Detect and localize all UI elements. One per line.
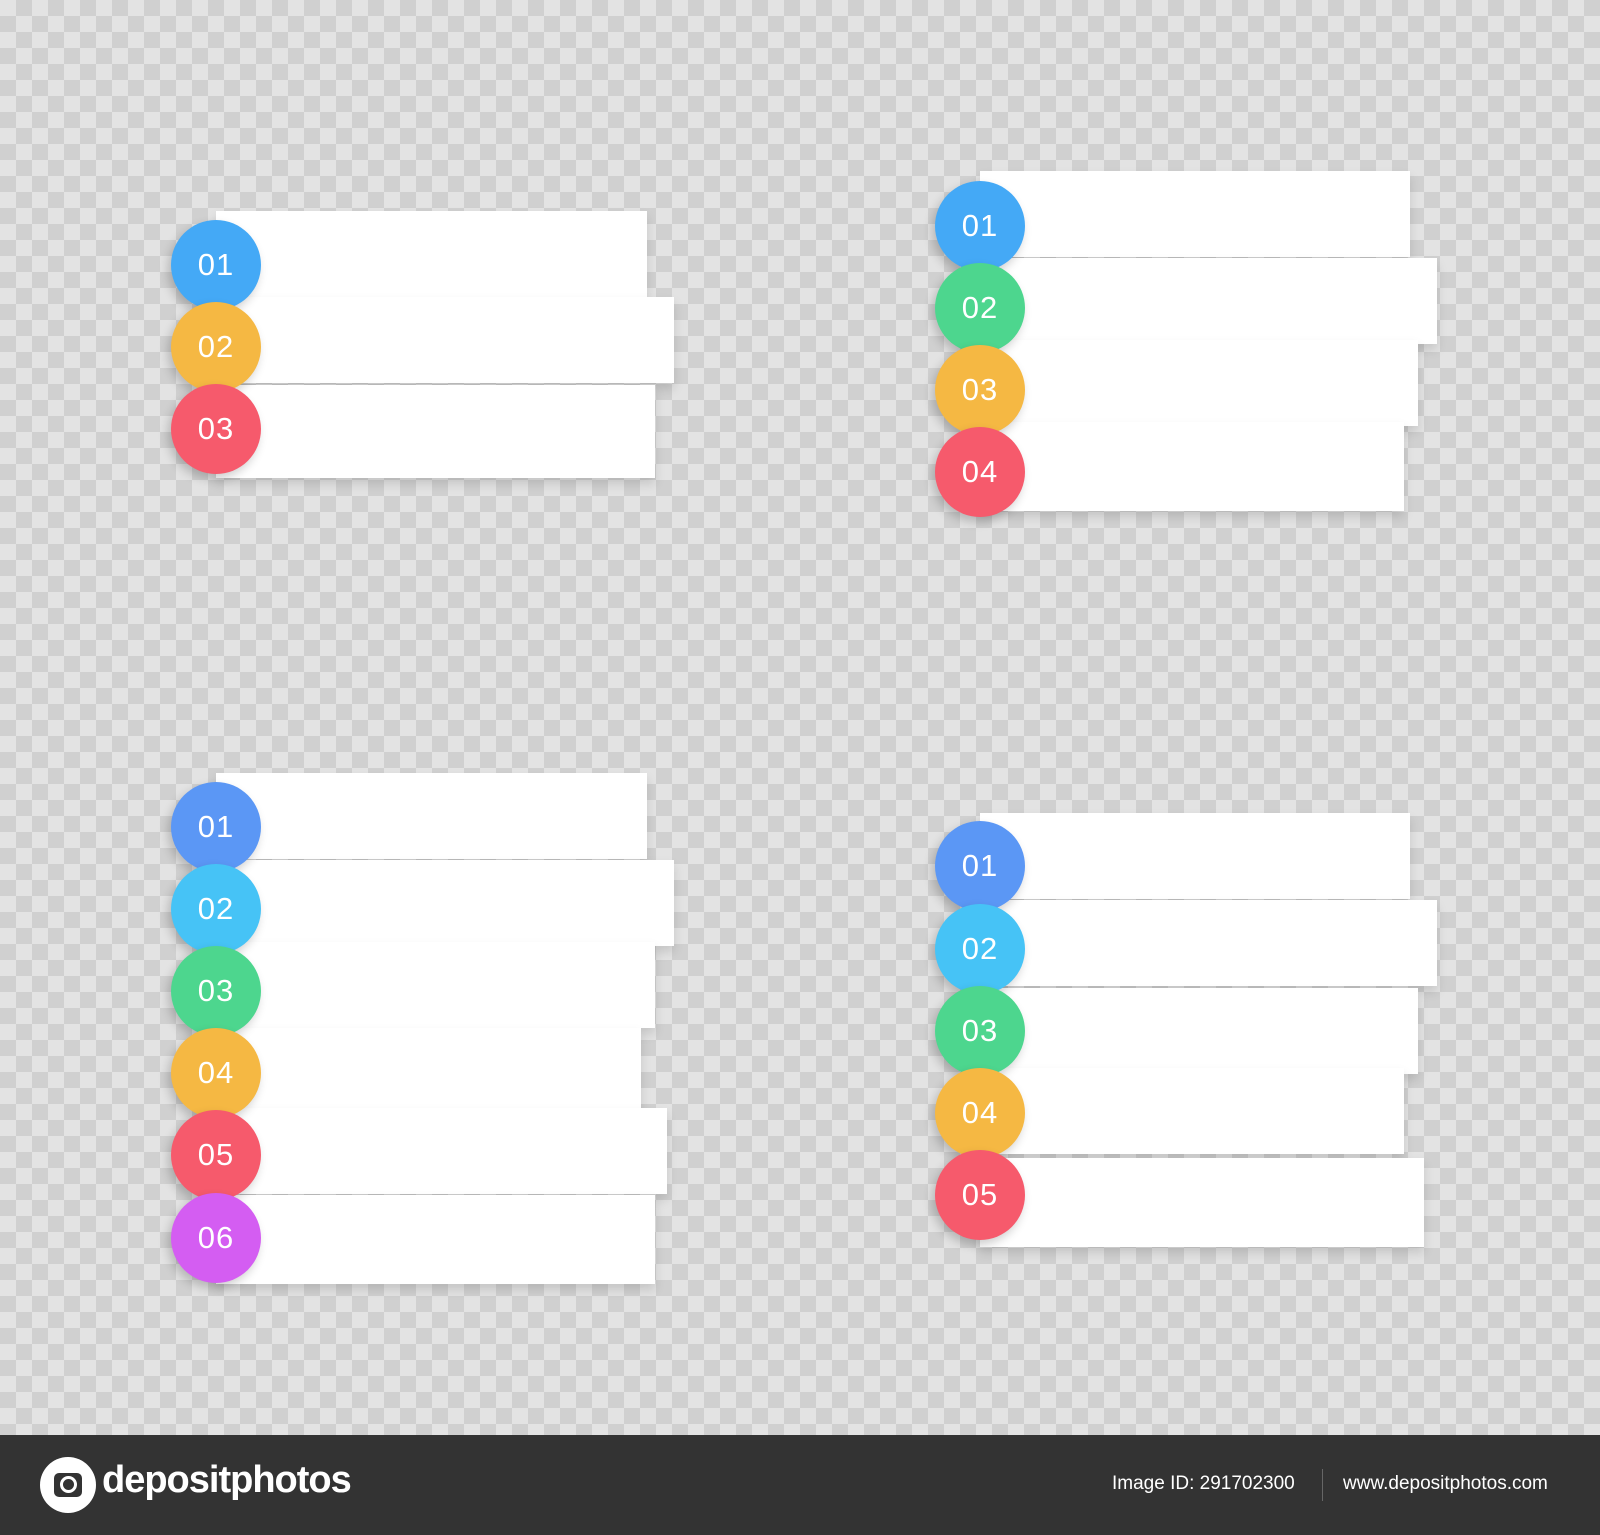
circle 05: 05	[198, 1137, 234, 1172]
circle 02	[935, 904, 1025, 994]
circle 02: 02	[198, 891, 234, 926]
circle 01	[935, 821, 1025, 911]
panel: six items	[164, 773, 677, 1294]
circle 03: 03	[198, 411, 234, 446]
circle 01	[935, 181, 1025, 271]
circle 04	[171, 1028, 261, 1118]
circle 03: 03	[198, 973, 234, 1008]
circle 04: 04	[962, 454, 998, 489]
circle 05: 05	[962, 1177, 998, 1212]
circle 01	[171, 220, 261, 310]
circle 06: 06	[198, 1220, 234, 1255]
circle 04: 04	[962, 1095, 998, 1130]
circle 03	[935, 986, 1025, 1076]
circle 02: 02	[962, 931, 998, 966]
circle 01: 01	[198, 809, 234, 844]
circle 05	[935, 1150, 1025, 1240]
panel: four items	[928, 171, 1440, 526]
circle 06	[171, 1193, 261, 1283]
circle 03	[171, 946, 261, 1036]
website: www.depositphotos.com	[1343, 1473, 1548, 1494]
circle 03: 03	[962, 372, 998, 407]
circle 04	[935, 427, 1025, 517]
circle 02: 02	[198, 329, 234, 364]
circle 01	[171, 782, 261, 872]
panel: three items	[164, 211, 677, 488]
circle 02	[935, 263, 1025, 353]
image id: Image ID: 291702300	[1112, 1473, 1295, 1494]
circle 04: 04	[198, 1055, 234, 1090]
logo text: depositphotos	[102, 1459, 351, 1501]
circle 03	[171, 384, 261, 474]
circle 05	[171, 1110, 261, 1200]
circle 04	[935, 1068, 1025, 1158]
circle 02	[171, 302, 261, 392]
circle 01: 01	[962, 208, 998, 243]
circle 01: 01	[962, 848, 998, 883]
logo icon	[40, 1457, 96, 1513]
panel: five items	[928, 813, 1440, 1256]
circle 02: 02	[962, 290, 998, 325]
footer bar	[0, 1435, 1600, 1535]
circle 03	[935, 345, 1025, 435]
circle 01: 01	[198, 247, 234, 282]
circle 03: 03	[962, 1013, 998, 1048]
circle 02	[171, 864, 261, 954]
